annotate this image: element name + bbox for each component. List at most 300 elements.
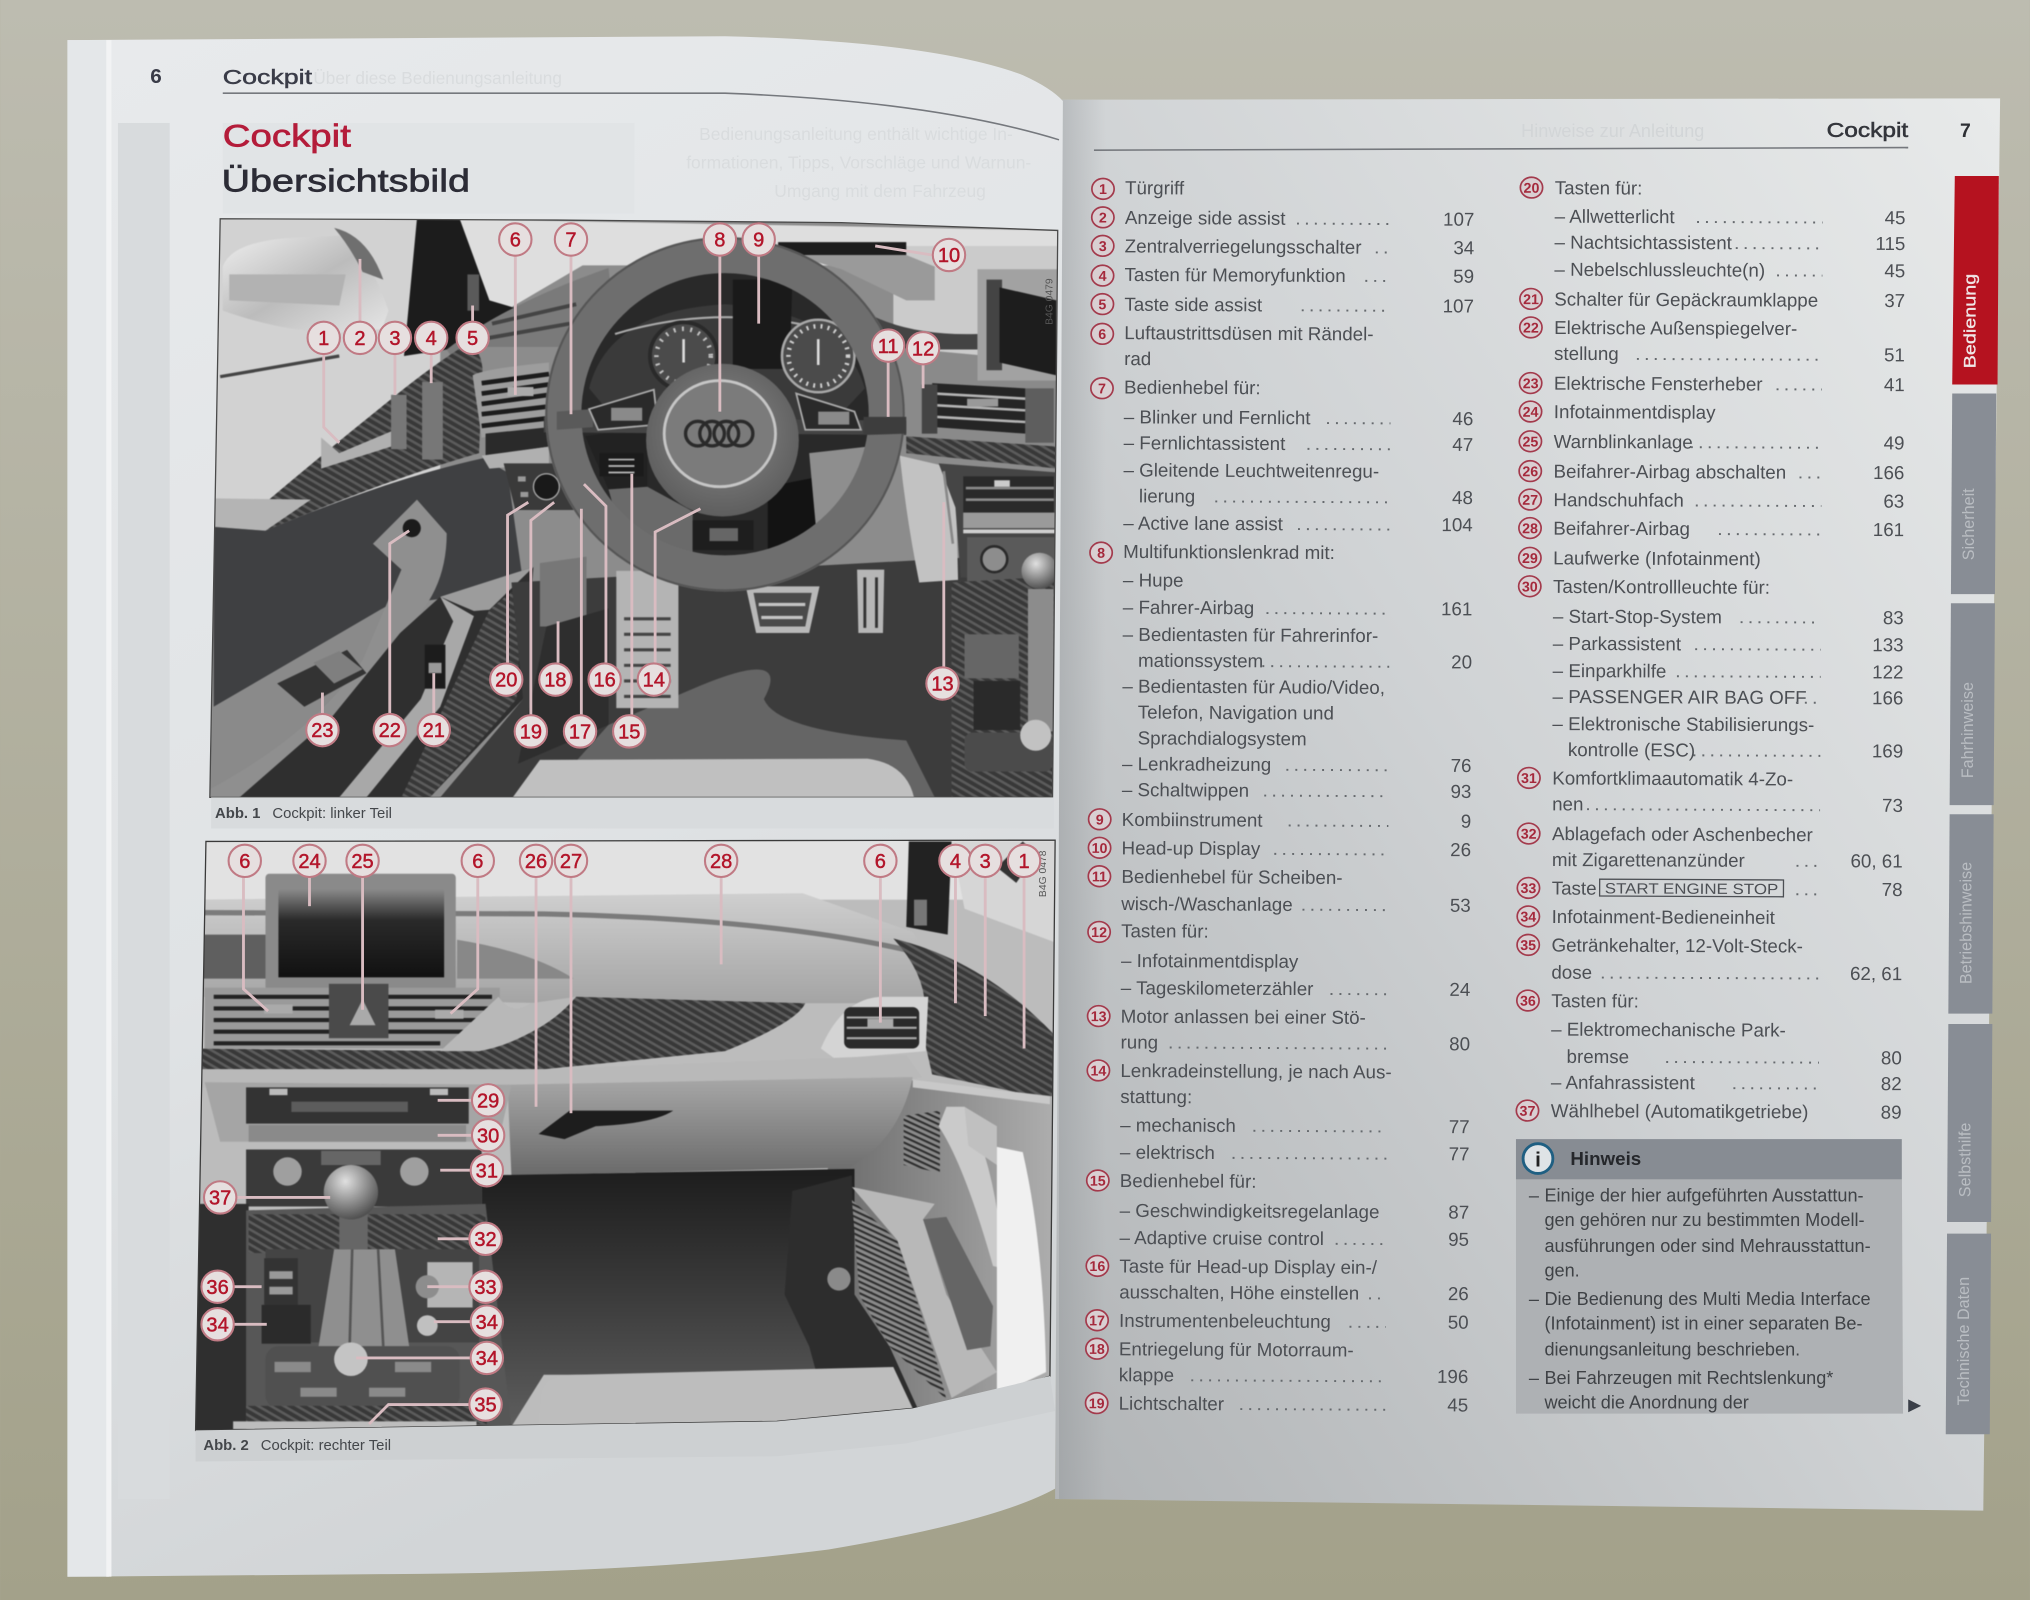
item 26: Beifahrer-Airbag abschalten [1554, 461, 1786, 483]
item 33 [1517, 877, 1903, 900]
item 30: kontrolle (ESC) [1568, 739, 1695, 761]
note text: gen gehören nur zu bestimmten Modell- [1544, 1210, 1865, 1230]
note text: Bei Fahrzeugen mit Rechtslenkung* [1544, 1368, 1833, 1388]
number labels: Abb. 2: 4 [950, 851, 961, 873]
item 14: stattung: [1120, 1086, 1192, 1107]
panel: left page [67, 36, 1063, 1577]
number labels: Abb. 1: 13 [931, 674, 954, 696]
item 12: 24 [1449, 979, 1470, 1000]
item 7: 104 [1441, 514, 1473, 535]
item 29: Laufwerke (Infotainment) [1553, 547, 1761, 569]
item 20: 45 [1884, 260, 1905, 281]
item 20: 45 [1885, 207, 1906, 228]
item 32 [1517, 823, 1903, 872]
list column 1: items 1-19 [1085, 177, 1475, 1416]
item 15: 15 [1090, 1174, 1106, 1190]
item 32: Ablagefach oder Aschenbecher [1552, 823, 1813, 845]
item 8: mationssystem [1138, 650, 1263, 671]
illustration: Abb. 1 cockpit left part [194, 214, 1068, 803]
number labels: Abb. 2: 36 [206, 1277, 229, 1299]
item 20: 115 [1875, 233, 1905, 254]
side tabs [1946, 176, 1999, 1434]
item 5: 5 [1098, 297, 1106, 313]
number labels: Abb. 1: 18 [544, 670, 567, 692]
note text: ausführungen oder sind Mehrausstattun- [1544, 1236, 1871, 1256]
item 9: Kombiinstrument [1122, 809, 1263, 831]
item 7: 46 [1452, 408, 1473, 429]
item 14: 77 [1449, 1143, 1470, 1164]
number labels: Abb. 2: 6 [875, 851, 886, 873]
item 17 [1086, 1310, 1469, 1333]
number labels: Abb. 2: 26 [525, 851, 547, 873]
left running header: Cockpit [223, 67, 313, 89]
item 8: 161 [1441, 598, 1472, 619]
item 28: Beifahrer-Airbag [1553, 518, 1690, 539]
item 11: 11 [1092, 869, 1107, 885]
tab: Betriebshinweise: Betriebshinweise [1958, 862, 1976, 984]
left page number: 6 [150, 65, 162, 88]
item 11: wisch-/Waschanlage [1120, 893, 1293, 915]
item 33: START ENGINE STOP [1605, 881, 1778, 898]
item 35: 62, 61 [1850, 963, 1902, 984]
item 30: 133 [1872, 634, 1904, 655]
item 10: 26 [1450, 839, 1471, 860]
number labels: Abb. 1: 22 [379, 720, 401, 742]
item 7: – Blinker und Fernlicht [1124, 406, 1311, 428]
number labels: Abb. 2: 34 [206, 1314, 229, 1336]
item 31: nen [1552, 793, 1583, 814]
tab: Selbsthilfe: Selbsthilfe [1956, 1123, 1974, 1197]
tab: Technische Daten: Technische Daten [1955, 1277, 1973, 1405]
item 36: Tasten für: [1551, 990, 1639, 1011]
item 24: 24 [1523, 405, 1539, 421]
caption: Abb. 1 [211, 797, 1054, 828]
item 13: rung [1121, 1032, 1158, 1053]
item 30: – Einparkhilfe [1553, 660, 1666, 682]
item 6: 6 [1098, 327, 1106, 343]
item 8 [1089, 541, 1473, 802]
caption: Abb. 2: Abb. 2 Cockpit: rechter Teil [203, 1438, 391, 1454]
tab: Sicherheit: Sicherheit [1960, 488, 1978, 560]
item 10: 10 [1092, 841, 1108, 857]
item 13: Motor anlassen bei einer Stö- [1121, 1006, 1366, 1028]
panel: right page [1055, 98, 2000, 1511]
item 13: 13 [1091, 1009, 1107, 1025]
item 15 [1086, 1170, 1469, 1250]
item 3: 34 [1453, 237, 1474, 258]
item 16: 26 [1448, 1283, 1469, 1304]
item 10 [1088, 837, 1471, 860]
number labels: Abb. 2: 3 [980, 851, 991, 873]
number labels: Abb. 1: 19 [520, 722, 542, 744]
item 2: Anzeige side assist [1125, 207, 1286, 229]
number labels: Abb. 1: 4 [426, 328, 437, 350]
item 27 [1519, 489, 1904, 512]
note text: – [1529, 1185, 1540, 1205]
tab: Bedienung [1952, 176, 1999, 384]
note heading: Hinweis [1570, 1148, 1641, 1169]
item 21 [1520, 288, 1905, 311]
ghost text showing through left page: Über diese Bedienungsanleitung [313, 68, 562, 88]
ghost text showing through left page: Bedienungsanleitung enthält wichtige In- [699, 124, 1013, 144]
item 35: 35 [1520, 938, 1536, 954]
number labels: Abb. 1: 2 [354, 328, 366, 350]
number labels: Abb. 1 [306, 223, 965, 748]
item 29: 29 [1522, 551, 1538, 567]
item 17: 17 [1089, 1313, 1105, 1329]
item 32: 60, 61 [1850, 850, 1903, 872]
item 20: – Allwetterlicht [1555, 206, 1675, 227]
item 13: 80 [1449, 1033, 1470, 1054]
item 12: – Tageskilometerzähler [1121, 977, 1314, 999]
title: Cockpit: Cockpit [223, 118, 351, 153]
item 34: 34 [1520, 910, 1536, 926]
item 6: rad [1124, 348, 1151, 369]
ghost text showing through right page: Hinweise zur Anleitung [1521, 121, 1704, 141]
left header rule [223, 93, 1059, 140]
item 33: Taste [1552, 877, 1597, 899]
item 8: 8 [1097, 546, 1105, 562]
item 20: – Nachtsichtassistent [1555, 232, 1733, 253]
item 30: – Elektronische Stabilisierungs- [1552, 713, 1814, 735]
item 9: 9 [1461, 811, 1471, 832]
item 23: Elektrische Fensterheber [1554, 373, 1763, 395]
item 14: – elektrisch [1120, 1142, 1215, 1163]
number labels: Abb. 2: 31 [476, 1160, 498, 1182]
number labels: Abb. 2: 1 [1018, 851, 1030, 873]
number labels: Abb. 2: 34 [476, 1348, 498, 1370]
item 37: 37 [1520, 1104, 1536, 1120]
item 35 [1517, 934, 1902, 984]
item 2: 107 [1443, 209, 1474, 230]
note text: dienungsanleitung beschrieben. [1544, 1339, 1800, 1359]
ghost text showing through left page [313, 68, 1031, 201]
item 36: 80 [1881, 1047, 1902, 1068]
item 28: 161 [1873, 519, 1904, 540]
tab: Fahrhinweise [1950, 603, 1995, 805]
number labels: Abb. 1: 15 [618, 722, 640, 744]
number labels: Abb. 1: 3 [389, 328, 401, 350]
item 4: Tasten für Memoryfunktion [1125, 264, 1346, 286]
item 16: 16 [1089, 1259, 1105, 1275]
item 22: stellung [1554, 343, 1619, 364]
number labels: Abb. 1: 7 [565, 230, 577, 252]
item 7 [1090, 376, 1474, 535]
item 30: 83 [1883, 607, 1904, 628]
caption: Abb. 1: Abb. 1 Cockpit: linker Teil [215, 806, 392, 822]
item 20 [1520, 177, 1906, 281]
item 8: – Lenkradheizung [1122, 753, 1271, 775]
item 26: 166 [1873, 462, 1904, 483]
item 8: 20 [1451, 651, 1472, 672]
number labels: Abb. 2: 6 [239, 851, 250, 873]
item 25: 25 [1522, 434, 1538, 451]
item 21: 37 [1884, 290, 1905, 311]
tab: Betriebshinweise [1948, 814, 1994, 1014]
item 18: 196 [1437, 1366, 1468, 1387]
item 8: – Schaltwippen [1122, 779, 1249, 801]
item 30: 169 [1872, 740, 1903, 762]
item 4: 59 [1453, 266, 1474, 287]
item 36: – Elektromechanische Park- [1551, 1019, 1786, 1041]
item 15: Bedienhebel für: [1120, 1170, 1257, 1192]
item 14 [1087, 1060, 1470, 1164]
illustration: Abb. 2 cockpit right part [192, 835, 1062, 1437]
caption: Abb. 2 [196, 1376, 1055, 1461]
item 23: 23 [1523, 376, 1539, 392]
item 12 [1088, 920, 1471, 1000]
item 1: 1 [1099, 182, 1107, 198]
number labels: Abb. 1: 17 [569, 722, 591, 744]
item 3: 3 [1099, 239, 1107, 255]
note header bar [1516, 1139, 1902, 1179]
item 14: Lenkradeinstellung, je nach Aus- [1120, 1060, 1392, 1082]
item 36: 82 [1881, 1073, 1902, 1094]
number labels: Abb. 1: 6 [510, 230, 521, 252]
item 17: 50 [1448, 1312, 1469, 1333]
item 15: – Adaptive cruise control [1119, 1227, 1324, 1249]
item 12: – Infotainmentdisplay [1121, 950, 1299, 972]
panel: Hinweis note box [1516, 1139, 1903, 1414]
item 36 [1516, 990, 1902, 1094]
number labels: Abb. 1: 20 [495, 670, 517, 692]
number labels: Abb. 2: 25 [351, 851, 374, 873]
item 19: 19 [1089, 1396, 1105, 1412]
number labels: Abb. 2: 29 [477, 1090, 499, 1112]
item 37: Wählhebel (Automatikgetriebe) [1551, 1100, 1808, 1122]
icon: info: i [1535, 1148, 1541, 1171]
item 16 [1086, 1255, 1469, 1304]
item 30: 30 [1522, 579, 1538, 596]
icon: info [1523, 1144, 1553, 1173]
item 17: Instrumentenbeleuchtung [1119, 1310, 1331, 1332]
item 26 [1519, 461, 1904, 483]
right header rule [1094, 148, 1908, 150]
item 11: 53 [1450, 895, 1471, 916]
item 22 [1520, 317, 1905, 365]
item 36: bremse [1567, 1046, 1629, 1067]
item 15: 95 [1448, 1229, 1469, 1250]
item 9 [1089, 809, 1471, 832]
item 7: – Active lane assist [1123, 512, 1284, 534]
item 22: 51 [1884, 344, 1905, 365]
note text [1529, 1185, 1871, 1412]
item 18: 18 [1089, 1342, 1105, 1358]
item 20: – Nebelschlussleuchte(n) [1554, 259, 1765, 281]
number labels: Abb. 1: 1 [318, 328, 329, 350]
item 4: 4 [1099, 269, 1107, 285]
item 23: 41 [1884, 374, 1905, 395]
item 16: ausschalten, Höhe einstellen [1119, 1281, 1359, 1304]
item 5: Taste side assist [1124, 294, 1263, 315]
item 28: 28 [1522, 521, 1538, 537]
item 10: Head-up Display [1122, 837, 1261, 859]
item 25: 49 [1884, 432, 1905, 453]
item 8: 93 [1450, 781, 1471, 802]
item 8: Multifunktionslenkrad mit: [1123, 541, 1335, 563]
item 5 [1091, 294, 1474, 317]
tab: Technische Daten [1946, 1234, 1991, 1434]
item 14: 77 [1449, 1116, 1470, 1137]
number labels: Abb. 1: 12 [912, 338, 934, 360]
item 7: – Fernlichtassistent [1124, 432, 1286, 454]
item 12: 12 [1091, 925, 1107, 941]
number labels: Abb. 2: 35 [474, 1395, 497, 1417]
item 1: Türgriff [1125, 177, 1185, 198]
item 27: 27 [1522, 493, 1538, 509]
number labels: Abb. 1: 11 [878, 336, 899, 358]
number labels: Abb. 2: 6 [472, 851, 483, 873]
item 36: – Anfahrassistent [1551, 1072, 1696, 1093]
note text: Die Bedienung des Multi Media Interface [1544, 1289, 1871, 1309]
item 14: 14 [1090, 1064, 1106, 1080]
number labels: Abb. 2: 32 [474, 1229, 497, 1251]
item 24: Infotainmentdisplay [1554, 401, 1716, 423]
item 30: – Parkassistent [1553, 633, 1682, 654]
item 22: Elektrische Außenspiegelver- [1554, 317, 1797, 339]
number labels: Abb. 2: 24 [298, 851, 321, 873]
note text: – [1529, 1368, 1540, 1388]
item 14: – mechanisch [1120, 1114, 1236, 1136]
number labels: Abb. 1: 14 [643, 670, 665, 692]
item 18 [1086, 1338, 1469, 1387]
item 8: – Fahrer-Airbag [1123, 597, 1254, 618]
item 11 [1088, 866, 1471, 916]
item 7: – Gleitende Leuchtweitenregu- [1123, 459, 1379, 482]
ghost text showing through left page: Umgang mit dem Fahrzeug [774, 181, 986, 201]
item 8: – Bedientasten für Audio/Video, [1122, 676, 1385, 698]
item 15: – Geschwindigkeitsregelanlage [1120, 1200, 1379, 1222]
item 30: – Start-Stop-System [1553, 606, 1722, 627]
item 27: 63 [1883, 491, 1904, 512]
arrow: continue [1908, 1399, 1921, 1412]
item 30 [1518, 576, 1904, 762]
number labels: Abb. 1: 5 [467, 328, 478, 350]
item 2: 2 [1099, 211, 1107, 227]
item 33: 78 [1882, 879, 1903, 900]
number labels: Abb. 2: 27 [560, 851, 582, 873]
item 30: – PASSENGER AIR BAG OFF [1553, 686, 1807, 708]
number labels: Abb. 2: 33 [474, 1277, 497, 1299]
tab: Bedienung: Bedienung [1961, 274, 1980, 368]
item 30: 122 [1872, 661, 1904, 683]
item 21: 21 [1523, 292, 1539, 308]
part code: B4G 0478 [1038, 850, 1049, 897]
item 3 [1092, 235, 1474, 258]
right page number: 7 [1960, 120, 1971, 142]
tab: Sicherheit [1951, 394, 1996, 594]
item 20: Tasten für: [1555, 177, 1642, 199]
item 9: 9 [1096, 812, 1104, 828]
number labels: Abb. 1: 10 [938, 245, 960, 267]
item 18: klappe [1119, 1364, 1174, 1386]
item 34: Infotainment-Bedieneinheit [1552, 906, 1776, 928]
item 3: Zentralverriegelungsschalter [1125, 235, 1362, 258]
number labels: Abb. 1: 21 [423, 720, 445, 742]
number labels: Abb. 2: 37 [209, 1188, 231, 1210]
number labels: Abb. 2: 30 [477, 1125, 499, 1147]
tab: Fahrhinweise: Fahrhinweise [1959, 682, 1977, 778]
number labels: Abb. 1: 9 [753, 230, 764, 252]
item 31 [1518, 767, 1903, 816]
item 15: 87 [1448, 1202, 1469, 1223]
item 35: Getränkehalter, 12-Volt-Steck- [1551, 934, 1803, 957]
item 18: Entriegelung für Motorraum- [1119, 1338, 1354, 1361]
part code: B4G 0479 [1045, 278, 1056, 325]
tab: Selbsthilfe [1947, 1024, 1992, 1222]
item 7: Bedienhebel für: [1124, 377, 1261, 398]
item 7: 47 [1452, 434, 1473, 455]
item 23 [1519, 372, 1905, 395]
item 19: 45 [1447, 1394, 1468, 1416]
item 32: 32 [1521, 827, 1537, 843]
number labels: Abb. 1: 16 [593, 670, 616, 692]
item 6 [1091, 322, 1374, 370]
item 25: Warnblinkanlage [1554, 431, 1693, 453]
item 30: Tasten/Kontrollleuchte für: [1553, 576, 1770, 598]
item 4 [1091, 264, 1474, 288]
number labels: Abb. 1: 23 [311, 720, 334, 742]
item 27: Handschuhfach [1553, 489, 1684, 511]
item 37 [1516, 1100, 1902, 1123]
note text: gen. [1544, 1260, 1580, 1280]
item 31: Komfortklimaautomatik 4-Zo- [1552, 767, 1793, 790]
note text: weicht die Anordnung der [1543, 1392, 1749, 1412]
item 19 [1085, 1393, 1468, 1416]
item 7: lierung [1139, 485, 1195, 507]
note text: Einige der hier aufgeführten Ausstattun- [1544, 1185, 1864, 1205]
item 11: Bedienhebel für Scheiben- [1121, 866, 1343, 888]
ghost text showing through left page: formationen, Tipps, Vorschläge und Warnun- [686, 152, 1031, 172]
item 8: – Bedientasten für Fahrerinfor- [1123, 624, 1378, 646]
right running header: Cockpit [1827, 120, 1909, 142]
item 31: 31 [1521, 771, 1537, 787]
item 2 [1092, 207, 1474, 230]
item 28 [1519, 517, 1904, 540]
item 26: 26 [1522, 464, 1538, 480]
item 6: Luftaustrittsdüsen mit Rändel- [1124, 322, 1374, 344]
item 13 [1087, 1005, 1470, 1054]
item 5: 107 [1443, 295, 1474, 317]
item 8: Telefon, Navigation und [1138, 702, 1334, 724]
item 19: Lichtschalter [1119, 1393, 1224, 1414]
item 1 [1092, 177, 1185, 200]
number labels: Abb. 2: 28 [710, 851, 732, 873]
item 7: 7 [1098, 381, 1106, 397]
item 8: – Hupe [1123, 569, 1184, 591]
item 16: Taste für Head-up Display ein-/ [1119, 1255, 1378, 1278]
item 12: Tasten für: [1121, 920, 1209, 942]
item 36: 36 [1520, 994, 1536, 1010]
item 33: 33 [1520, 881, 1536, 897]
item 37: 89 [1881, 1102, 1902, 1123]
item 20: 20 [1524, 181, 1540, 197]
note text: (Infotainment) ist in einer separaten Be- [1544, 1313, 1863, 1333]
item 31: 73 [1882, 795, 1903, 816]
item 8: Sprachdialogsystem [1138, 727, 1307, 749]
number labels: Abb. 1: 8 [714, 230, 725, 252]
item 32: mit Zigarettenanzünder [1552, 849, 1745, 871]
item 7: 48 [1452, 487, 1473, 508]
note text: – [1529, 1289, 1540, 1309]
list column 2: items 20-37 [1516, 177, 1906, 1123]
heading: Übersichtsbild: Übersichtsbild [221, 164, 470, 199]
number labels: Abb. 2 [201, 845, 1040, 1424]
item 21: Schalter für Gepäckraumklappe [1554, 289, 1818, 311]
item 8: 76 [1451, 755, 1472, 776]
item 35: dose [1551, 962, 1592, 983]
number labels: Abb. 2: 34 [476, 1312, 498, 1334]
